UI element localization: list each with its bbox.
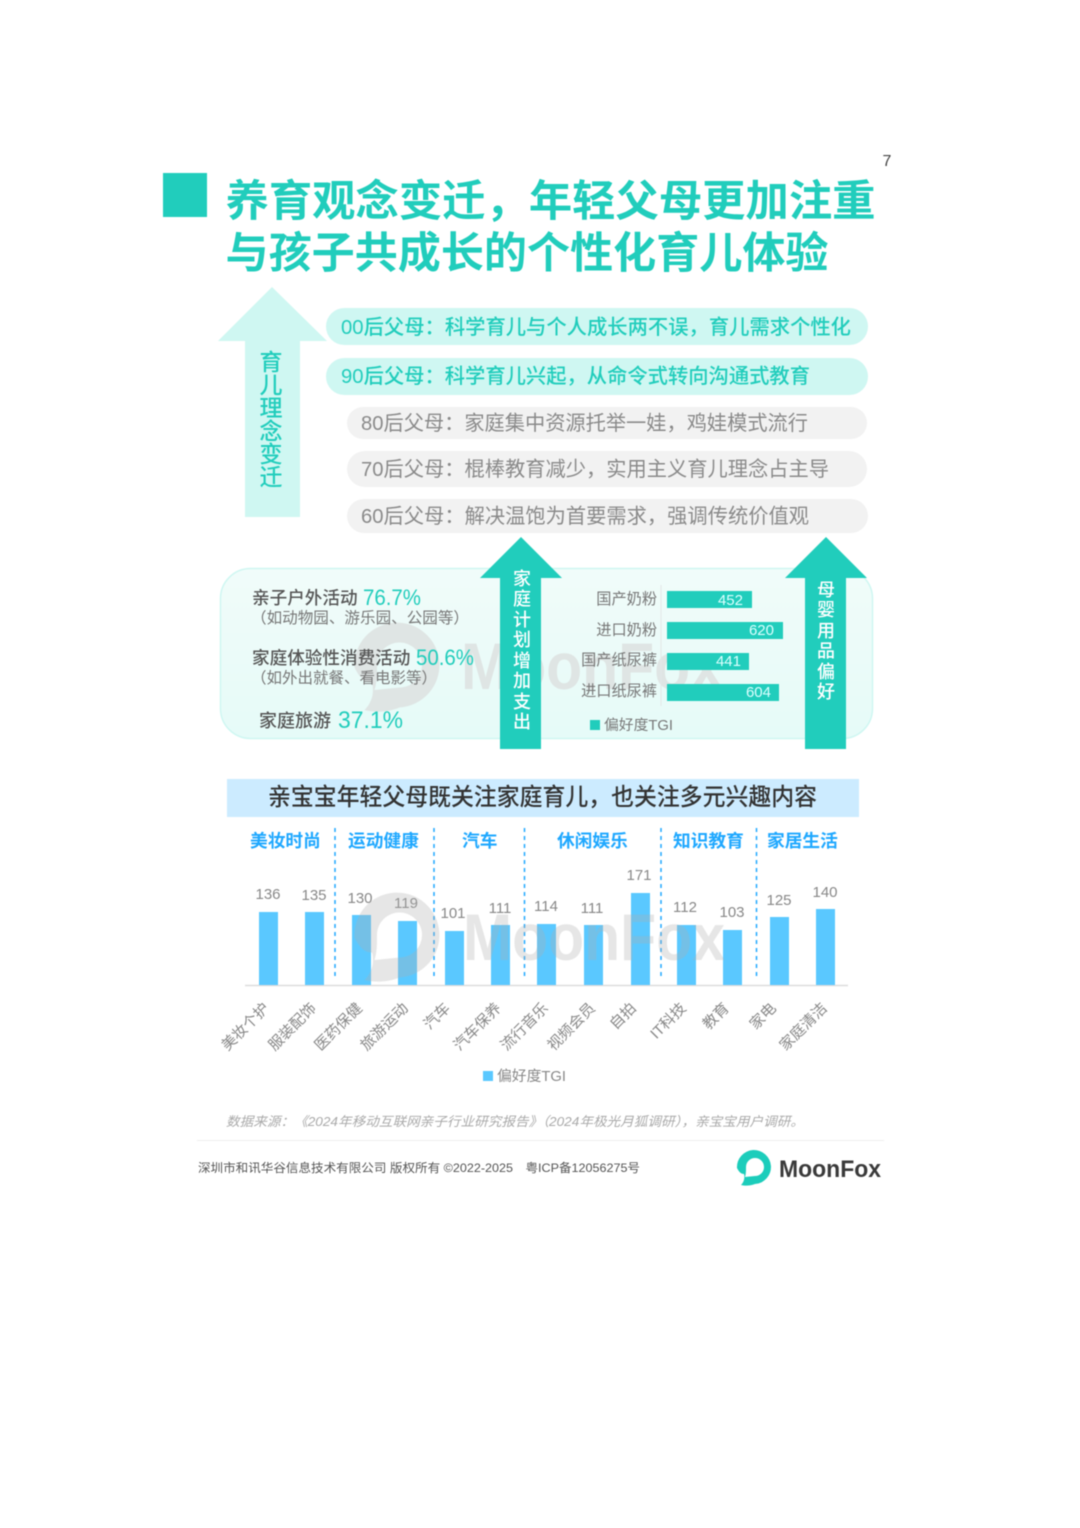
watermark: MoonFox	[461, 629, 723, 703]
stat: family travel: 37.1%	[338, 707, 403, 734]
legend: TGI: 偏好度TGI	[604, 717, 673, 734]
category headings: 休闲娱乐	[557, 831, 628, 851]
stat: experience spending: （如外出就餐、看电影等）	[251, 669, 437, 687]
watermark: chart	[354, 893, 725, 982]
pill: 90s parents	[326, 358, 868, 395]
arrow: maternal product preference: 好	[817, 682, 835, 702]
legend: chart TGI: 偏好度TGI	[497, 1068, 566, 1085]
arrow: parenting concept change: 念	[260, 418, 282, 444]
arrow: family plans to increase spending: 划	[513, 630, 531, 650]
arrow: family plans to increase spending: 计	[513, 610, 531, 630]
bar chart: maternal product TGI: 进口奶粉	[596, 622, 657, 639]
footer copyright: 深圳市和讯华谷信息技术有限公司 版权所有 ©2022-2025 粤ICP备12056275号	[198, 1160, 640, 1175]
bar chart: interest TGI: 140	[812, 884, 838, 901]
arrow: family plans to increase spending: 支	[513, 692, 531, 712]
arrow: family plans to increase spending	[480, 537, 562, 749]
bar chart: interest TGI: 119	[394, 895, 418, 912]
category headings: 美妆时尚	[250, 830, 321, 851]
bar chart: interest TGI: 135	[301, 887, 327, 904]
bar chart: interest TGI: 汽车	[421, 1000, 454, 1033]
stat: outdoor activity: （如动物园、游乐园、公园等）	[251, 609, 469, 627]
arrow: family plans to increase spending: 家	[513, 569, 531, 589]
arrow: parenting concept change: 儿	[260, 372, 282, 398]
arrow: family plans to increase spending: 加	[513, 671, 531, 691]
bar chart: interest TGI	[218, 867, 848, 1054]
arrow: parenting concept change	[218, 287, 327, 517]
stat: experience spending: 家庭体验性消费活动	[252, 648, 410, 668]
arrow: maternal product preference: 品	[817, 641, 835, 661]
watermark	[354, 623, 723, 712]
bar chart: maternal product TGI: 452	[718, 592, 743, 609]
title line 1: 养育观念变迁，年轻父母更加注重	[226, 178, 876, 226]
bar chart: maternal product TGI: 441	[716, 653, 741, 670]
bar chart: interest TGI: 汽车保养	[450, 1000, 505, 1054]
bar chart: interest TGI: 自拍	[607, 1000, 640, 1033]
bar chart: interest TGI: 125	[766, 892, 792, 909]
category headings: 家居生活	[767, 830, 838, 851]
pill: 70s parents	[347, 451, 867, 487]
category headings: 汽车	[462, 830, 497, 851]
stat: family travel: 家庭旅游	[259, 711, 331, 731]
bar chart: maternal product TGI: 进口纸尿裤	[581, 683, 657, 700]
arrow: family plans to increase spending: 增	[513, 651, 531, 671]
arrow: maternal product preference: 偏	[817, 662, 835, 682]
bar chart: interest TGI: 112	[673, 899, 697, 916]
pill: 00s parents: 00后父母：科学育儿与个人成长两不误，育儿需求个性化	[341, 316, 851, 339]
arrow: parenting concept change: 理	[260, 395, 282, 421]
bar chart: interest TGI: 101	[440, 905, 466, 922]
bar chart: interest TGI: 教育	[700, 1000, 733, 1033]
bar chart: maternal product TGI: 国产奶粉	[596, 591, 657, 608]
generation pills	[326, 308, 868, 533]
stat: experience spending: 50.6%	[416, 645, 474, 670]
title line 2: 与孩子共成长的个性化育儿体验	[226, 230, 829, 278]
arrow: maternal product preference	[785, 537, 867, 749]
arrow: parenting concept change: 育	[260, 349, 282, 375]
stat: family travel	[259, 707, 403, 734]
bar chart: interest TGI: 111	[581, 900, 603, 917]
bar chart: interest TGI: 111	[489, 900, 511, 917]
category headings	[250, 830, 838, 851]
panel: family spending and maternal products	[220, 568, 872, 738]
stat: outdoor activity	[251, 585, 469, 627]
bar chart: interest TGI: 视频会员	[544, 1000, 599, 1054]
bar chart: interest TGI: 服装配饰	[265, 1000, 320, 1054]
bar chart: maternal product TGI	[581, 585, 783, 706]
arrow: family plans to increase spending: 出	[513, 712, 531, 732]
stat: outdoor activity: 76.7%	[363, 585, 421, 610]
bar chart: interest TGI: IT科技	[647, 1000, 690, 1042]
bar chart: interest TGI: 130	[347, 890, 373, 907]
bar chart: maternal product TGI: 620	[749, 622, 774, 639]
stat: outdoor activity: 亲子户外活动	[252, 588, 358, 608]
title marker square	[163, 173, 207, 217]
category headings: 运动健康	[348, 830, 419, 851]
arrow: family plans to increase spending: 庭	[513, 589, 531, 609]
heading: interests banner: 亲宝宝年轻父母既关注家庭育儿，也关注多元兴趣内容	[268, 784, 817, 811]
bar chart: interest TGI: 旅游运动	[357, 1000, 412, 1054]
pill: 90s parents: 90后父母：科学育儿兴起，从命令式转向沟通式教育	[341, 364, 810, 388]
heading: interests banner	[227, 779, 859, 817]
bar chart: interest TGI: 114	[534, 898, 558, 915]
pill: 60s parents: 60后父母：解决温饱为首要需求，强调传统价值观	[361, 505, 809, 528]
bar chart: maternal product TGI: 604	[746, 684, 771, 701]
bar chart: maternal product TGI: 国产纸尿裤	[581, 652, 657, 669]
arrow: maternal product preference: 母	[817, 580, 835, 600]
arrow: parenting concept change: 迁	[260, 464, 282, 490]
stat: experience spending	[251, 645, 474, 687]
bar chart: interest TGI: 医药保健	[311, 1000, 366, 1054]
pill: 00s parents	[326, 308, 868, 345]
logo: MoonFox	[737, 1150, 882, 1186]
bar chart: interest TGI: 136	[255, 886, 281, 903]
logo: MoonFox: MoonFox	[779, 1156, 882, 1183]
bar chart: interest TGI: 171	[626, 867, 652, 884]
page number: 7	[883, 153, 892, 170]
pill: 80s parents	[347, 407, 867, 439]
pill: 70s parents: 70后父母：棍棒教育减少，实用主义育儿理念占主导	[361, 457, 829, 481]
arrow: maternal product preference: 婴	[817, 600, 835, 620]
arrow: parenting concept change: 变	[260, 441, 282, 467]
arrow: maternal product preference: 用	[817, 621, 835, 641]
pill: 80s parents: 80后父母：家庭集中资源托举一娃，鸡娃模式流行	[361, 412, 808, 435]
bar chart: interest TGI: 流行音乐	[497, 1000, 552, 1054]
bar chart: interest TGI: 103	[719, 904, 745, 921]
title block	[163, 173, 876, 278]
data source note: 数据来源：《2024年移动互联网亲子行业研究报告》（2024年极光月狐调研），亲宝宝用户调研。	[226, 1114, 804, 1129]
bar chart: interest TGI: 美妆个护	[218, 1000, 273, 1054]
bar chart: interest TGI: 家庭清洁	[776, 1000, 831, 1054]
category headings: 知识教育	[673, 830, 744, 851]
watermark: chart: MoonFox	[463, 900, 725, 974]
pill: 60s parents	[347, 499, 868, 533]
bar chart: interest TGI: 家电	[747, 1000, 780, 1033]
